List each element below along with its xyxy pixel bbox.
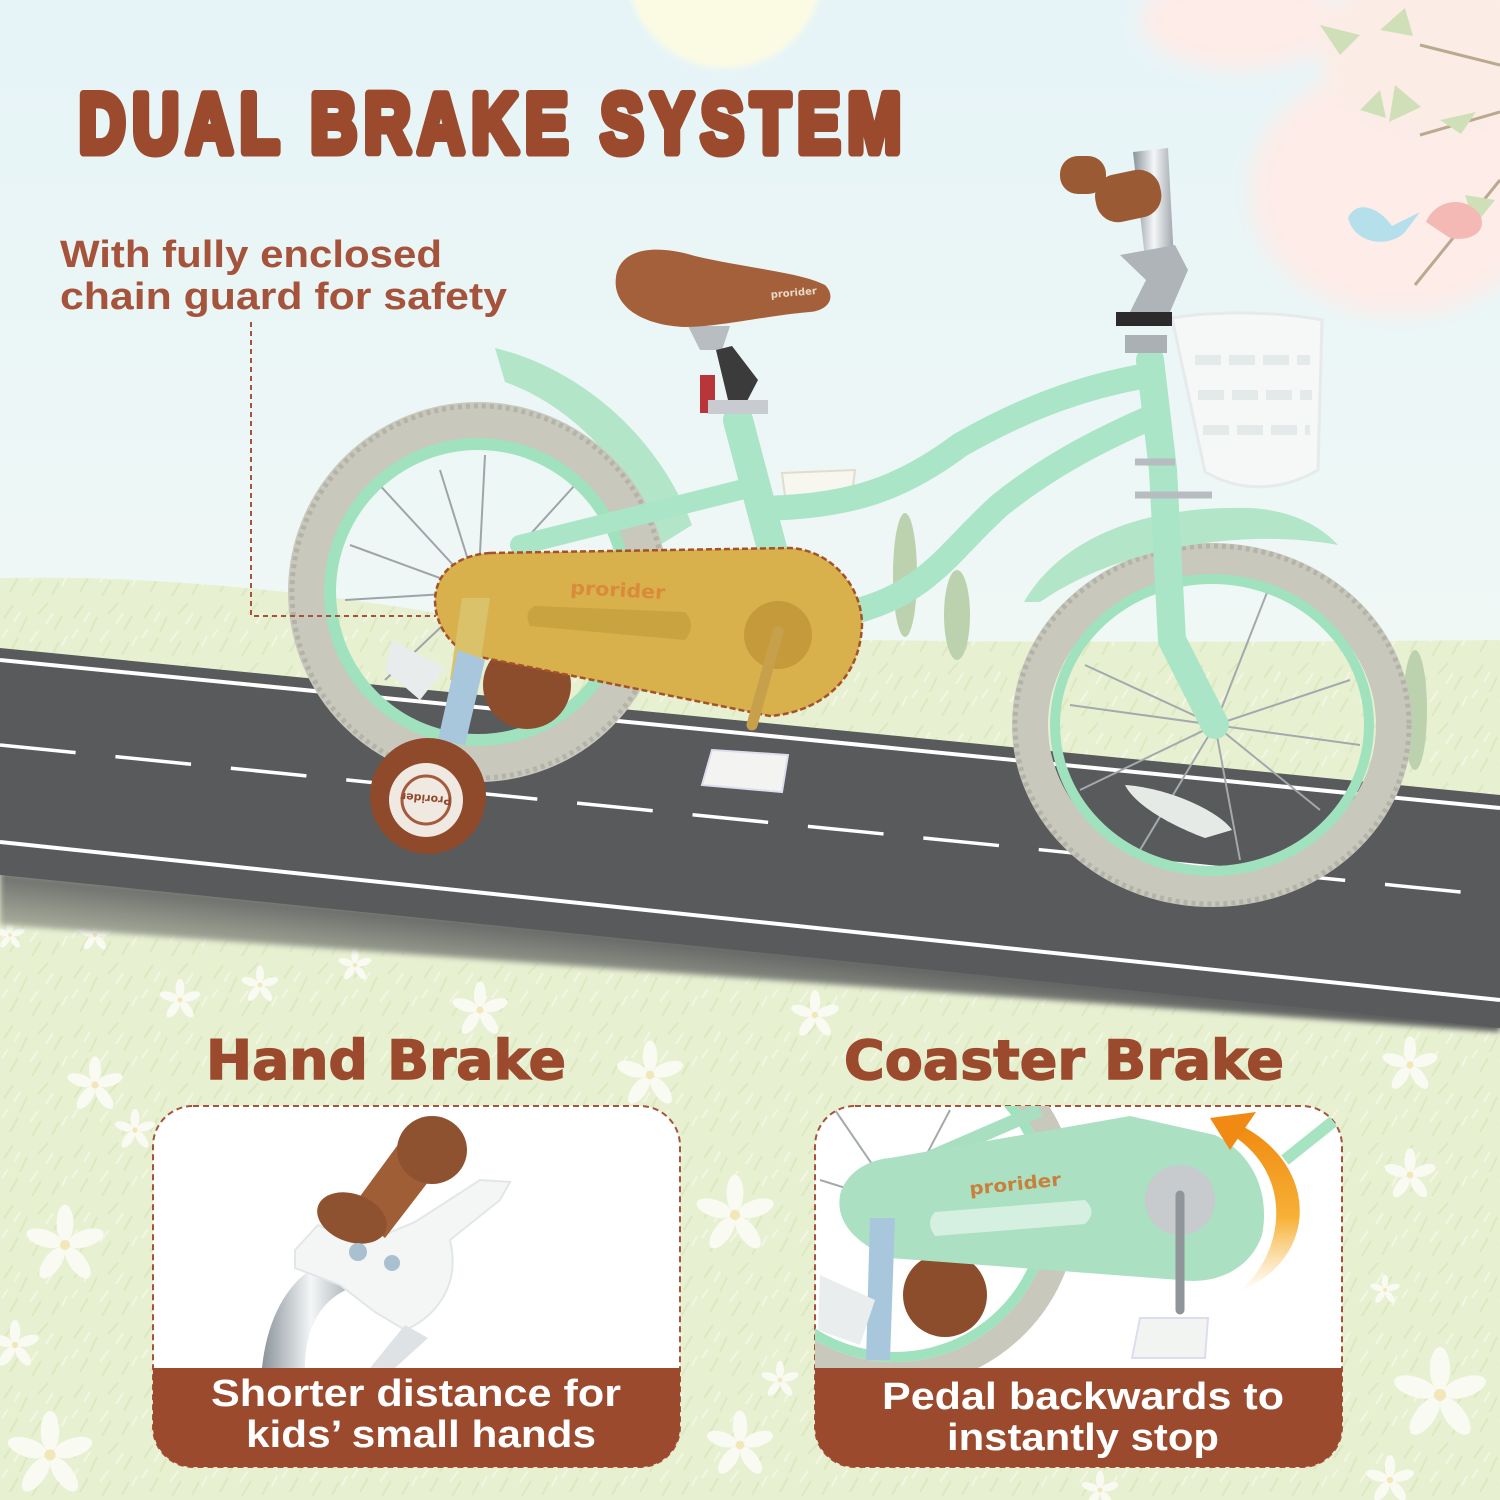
handlebar grips bbox=[1060, 156, 1165, 226]
hand brake photo bbox=[262, 1116, 510, 1368]
handlebar stem bbox=[1116, 148, 1212, 495]
front fender bbox=[1024, 508, 1338, 602]
blossom tree bbox=[1140, 0, 1500, 315]
rear fender bbox=[495, 348, 692, 545]
training wheel bbox=[370, 738, 486, 854]
panel: hand brake bbox=[153, 1106, 680, 1467]
sun bbox=[627, 0, 823, 68]
training wheel bracket bbox=[450, 598, 490, 680]
saddle bbox=[616, 250, 830, 327]
pedal bbox=[702, 750, 788, 792]
grass field bbox=[0, 578, 1500, 1500]
hand brake caption band bbox=[153, 1368, 680, 1467]
coaster caption: Pedal backwards to bbox=[882, 1376, 1284, 1418]
callout: chain guard: With fully enclosed bbox=[60, 234, 442, 276]
birds bbox=[1348, 202, 1482, 242]
distant trees bbox=[893, 513, 1427, 770]
panel: coaster brake bbox=[814, 1105, 1343, 1468]
frame bbox=[520, 360, 1215, 725]
callout: chain guard: chain guard for safety bbox=[60, 276, 507, 318]
saddle logo: prorider bbox=[770, 286, 817, 301]
crank hub bbox=[744, 601, 812, 669]
chain guard logo: prorider bbox=[570, 577, 666, 604]
training wheel: Prorider bbox=[400, 790, 452, 807]
road bbox=[0, 648, 1500, 1032]
heading: hand brake: Hand Brake bbox=[206, 1029, 566, 1092]
flowers bbox=[0, 918, 1489, 1500]
rear wheel bbox=[292, 406, 664, 778]
coaster caption band bbox=[815, 1368, 1342, 1467]
hand brake caption: Shorter distance for bbox=[211, 1373, 621, 1415]
crank arm bbox=[752, 632, 778, 725]
heading: coaster brake: Coaster Brake bbox=[844, 1029, 1284, 1092]
panel: hand brake: kids’ small hands bbox=[246, 1414, 596, 1456]
seat post and reflector bbox=[688, 326, 768, 414]
basket bbox=[1172, 313, 1322, 487]
rear sprocket bbox=[483, 641, 571, 729]
callout: chain guard bbox=[60, 234, 507, 616]
chain guard slot bbox=[527, 606, 691, 640]
front wheel bbox=[1015, 546, 1409, 904]
bicycle bbox=[292, 148, 1409, 904]
coaster rotation arrow bbox=[1210, 1112, 1300, 1292]
coaster brake photo: prorider bbox=[968, 1169, 1062, 1200]
background sky bbox=[0, 0, 1500, 700]
panel: coaster brake: instantly stop bbox=[947, 1417, 1219, 1459]
coaster brake photo bbox=[815, 1106, 1337, 1368]
title: DUAL BRAKE SYSTEM bbox=[79, 77, 901, 170]
chain guard bbox=[435, 548, 862, 716]
back pedal bbox=[782, 470, 855, 496]
